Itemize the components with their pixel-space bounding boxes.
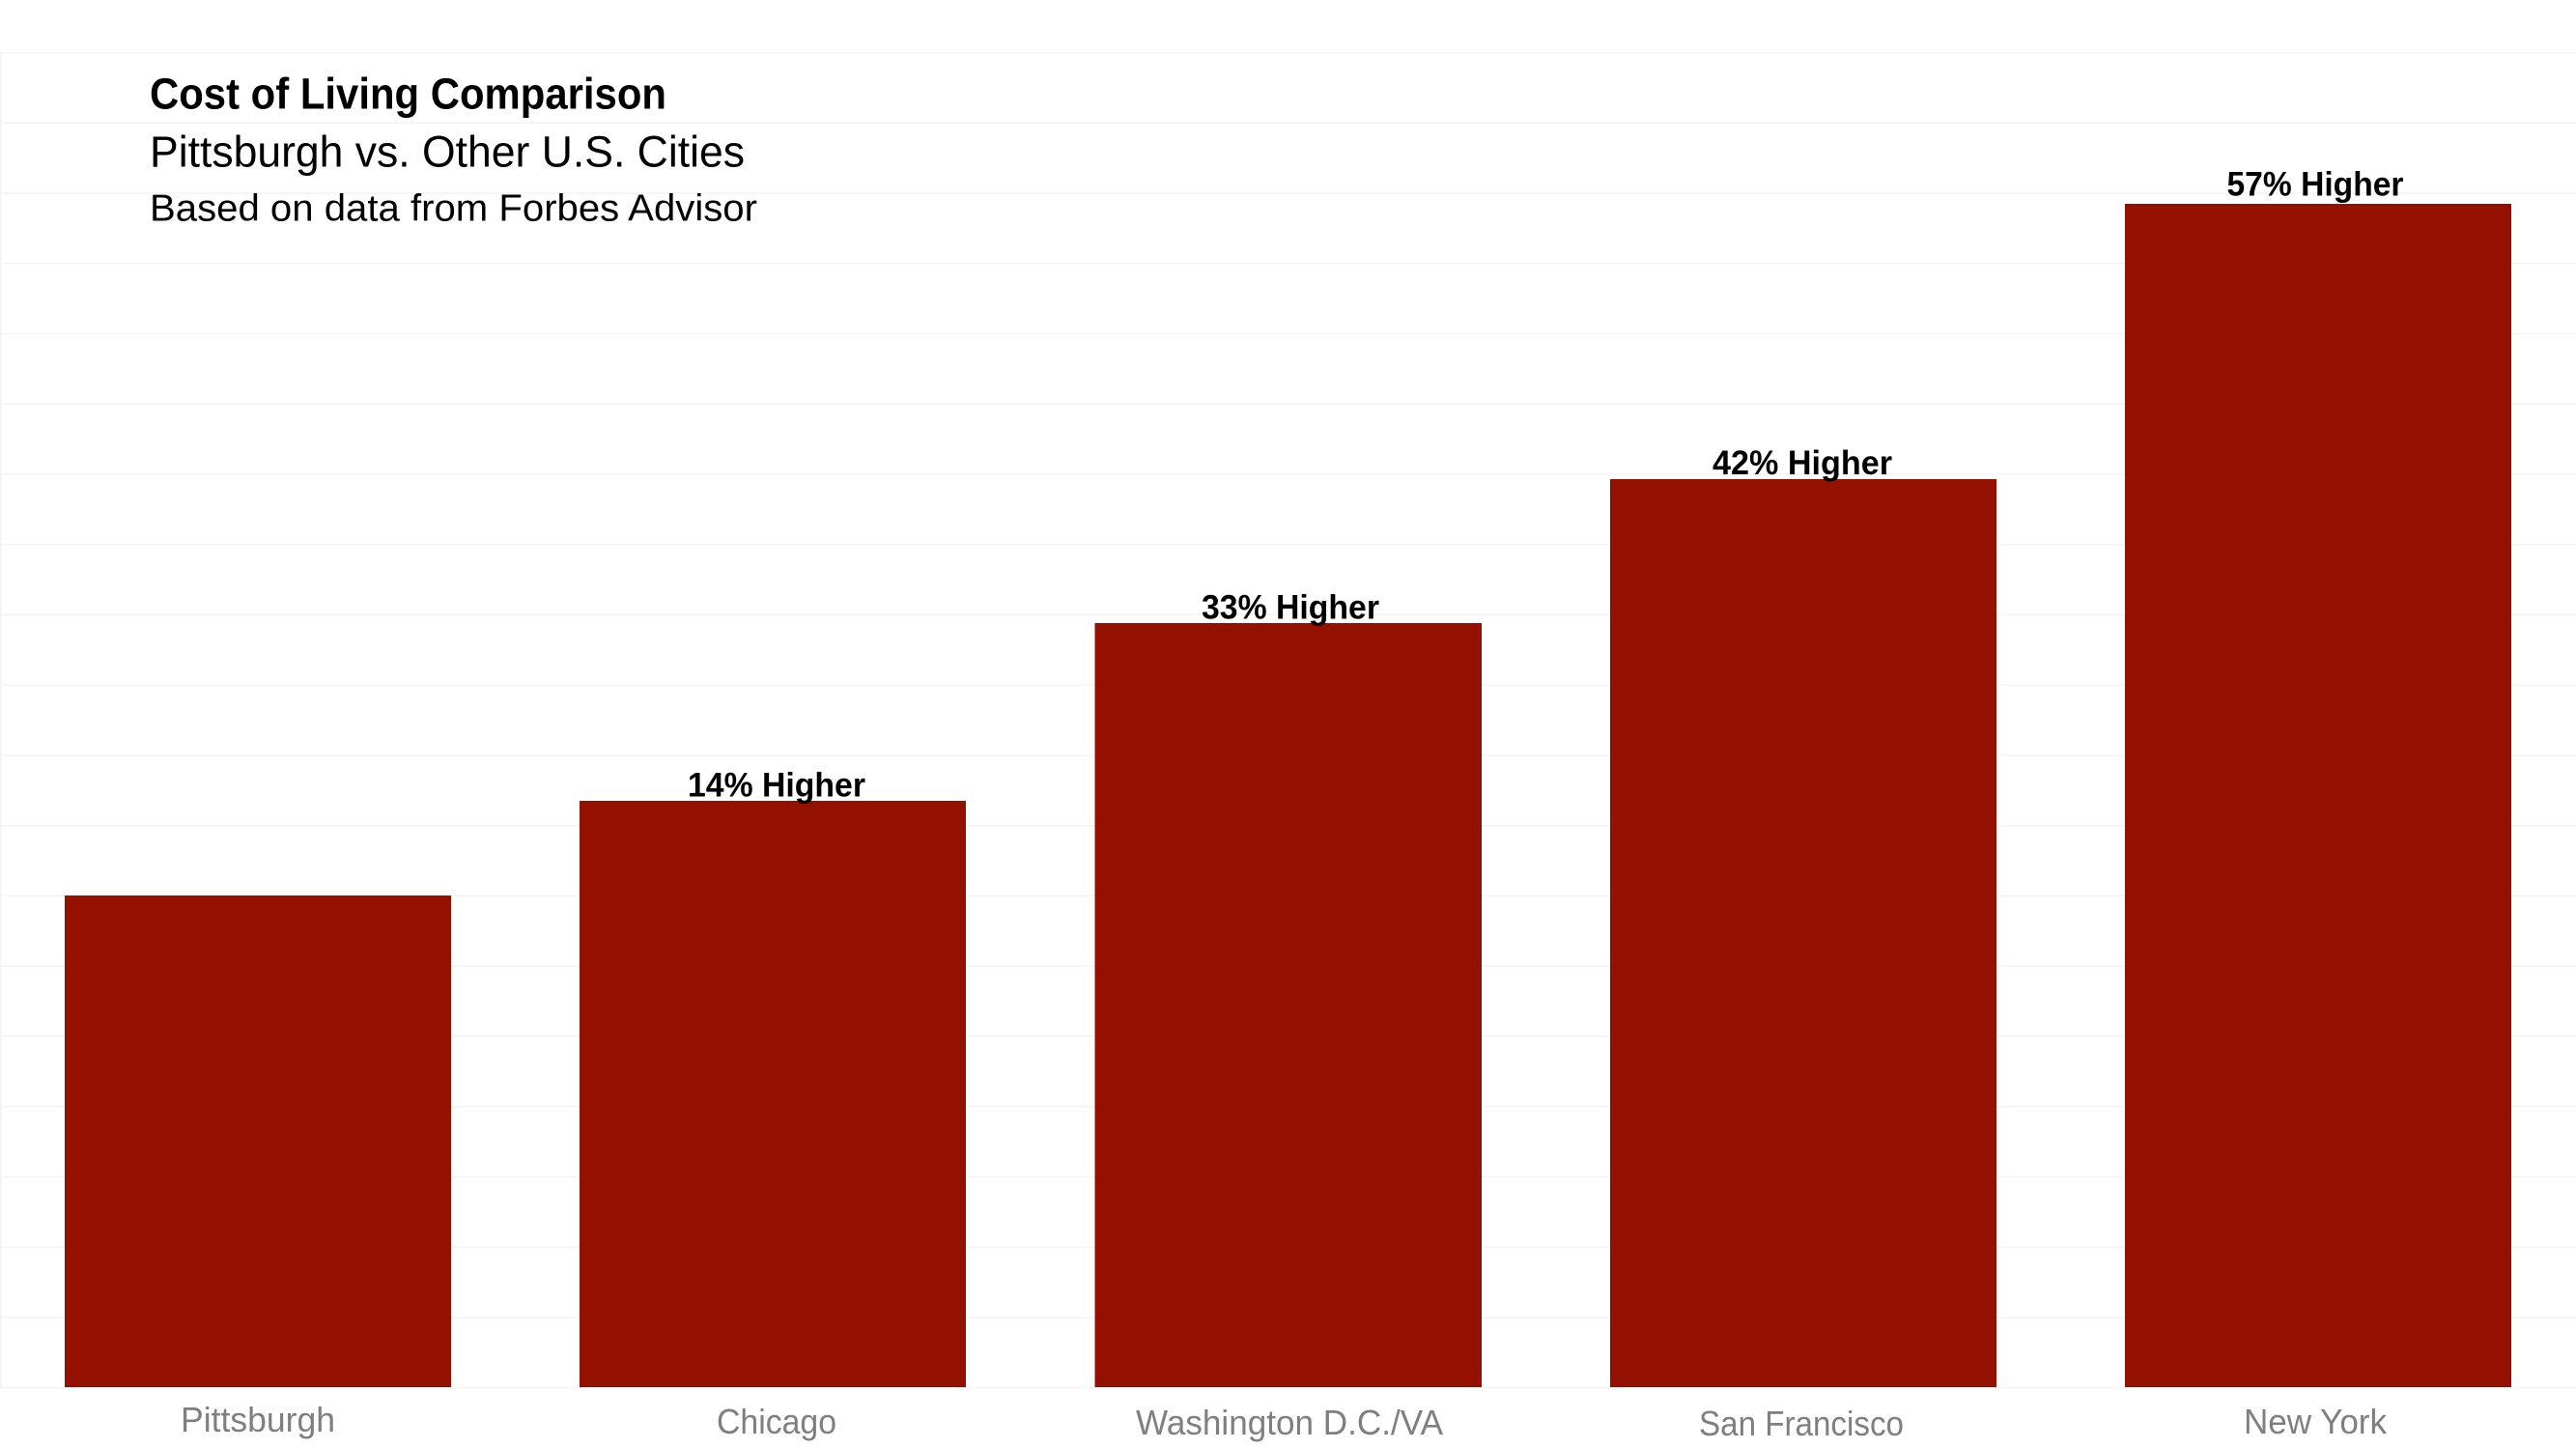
bar: Pittsburgh <box>65 895 451 1387</box>
category label: Washington D.C./VA: Washington D.C./VA <box>1136 1403 1443 1442</box>
bar: Washington D.C./VA <box>1095 623 1482 1387</box>
title block <box>150 70 757 230</box>
category label: Chicago: Chicago <box>717 1402 836 1441</box>
value label: Washington D.C./VA: 33% Higher <box>1202 589 1379 626</box>
value label: Chicago: 14% Higher <box>688 767 865 804</box>
category label: Pittsburgh: Pittsburgh <box>181 1400 335 1439</box>
category label: New York: New York <box>2244 1402 2388 1441</box>
bar: Chicago <box>580 801 966 1387</box>
title: Cost of Living Comparison <box>150 70 666 118</box>
source note: Based on data from Forbes Advisor <box>150 187 757 230</box>
bar: San Francisco <box>1610 479 1996 1387</box>
value label: New York: 57% Higher <box>2227 166 2404 203</box>
subtitle: Pittsburgh vs. Other U.S. Cities <box>150 128 745 176</box>
bar: New York <box>2125 204 2511 1387</box>
value label: San Francisco: 42% Higher <box>1713 444 1892 482</box>
category label: San Francisco: San Francisco <box>1699 1404 1904 1443</box>
